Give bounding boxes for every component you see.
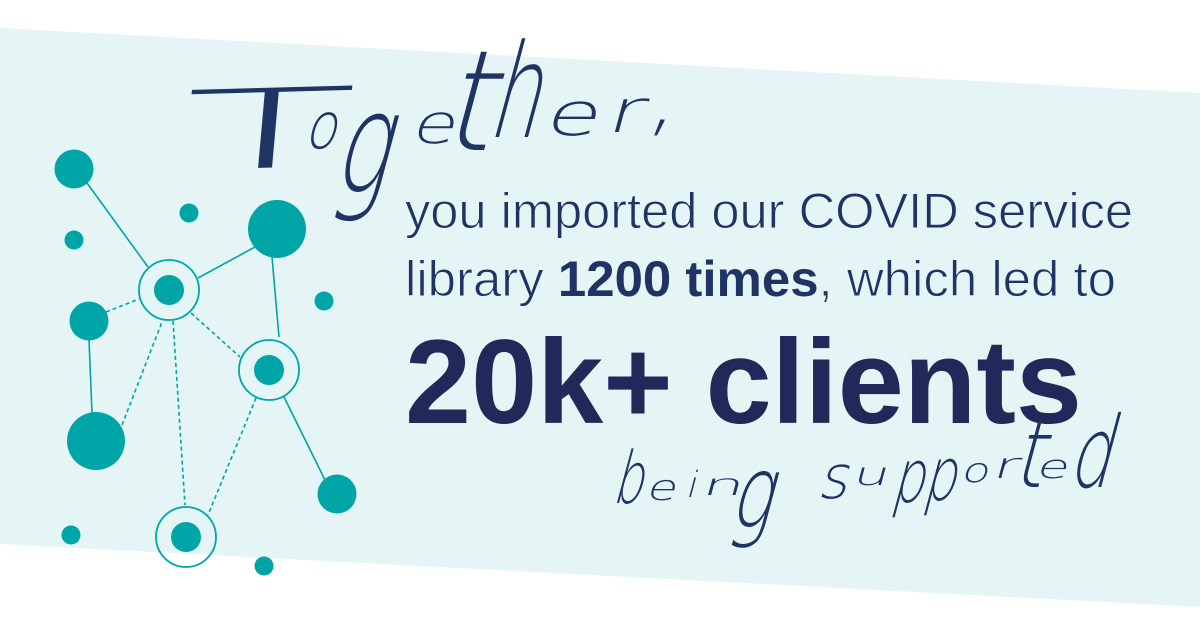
script heading: Together,: e: [406, 93, 467, 157]
big statistic: 20k+ clients: [405, 315, 1082, 449]
script caption: being supported: d: [1060, 395, 1134, 511]
script heading: Together,: h: [478, 17, 569, 168]
script heading: Together,: o: [299, 90, 351, 164]
script heading: Together,: T: [164, 57, 382, 196]
script heading: Together,: r: [601, 77, 657, 147]
script caption: being supported: g: [722, 436, 795, 552]
network diagram: [54, 150, 356, 576]
script heading: Together,: ,: [641, 41, 698, 147]
body text line 2: library 1200 times, which led to: [405, 251, 1116, 307]
script caption: being supported: p: [886, 433, 941, 520]
script caption: being supported: b: [607, 437, 659, 521]
ringed nodes: [139, 260, 299, 567]
script caption: being supported: s: [813, 443, 862, 513]
script caption: being supported: r: [989, 445, 1028, 487]
script heading: Together,: e: [539, 80, 612, 150]
script caption: being supported: u: [849, 456, 895, 493]
script caption: being supported: t: [1006, 399, 1066, 510]
large nodes: [54, 150, 356, 576]
script caption: being supported: e: [1033, 448, 1075, 486]
script heading: Together,: g: [322, 62, 421, 225]
script caption: being supported: n: [699, 468, 750, 503]
script caption: being supported: e: [643, 467, 684, 509]
script caption: being supported: o: [958, 452, 996, 491]
script heading: Together,: t: [431, 20, 525, 183]
script caption: being supported: i: [683, 464, 704, 506]
body text line 1: you imported our COVID service: [405, 183, 1133, 239]
script caption: being supported: p: [918, 431, 973, 518]
